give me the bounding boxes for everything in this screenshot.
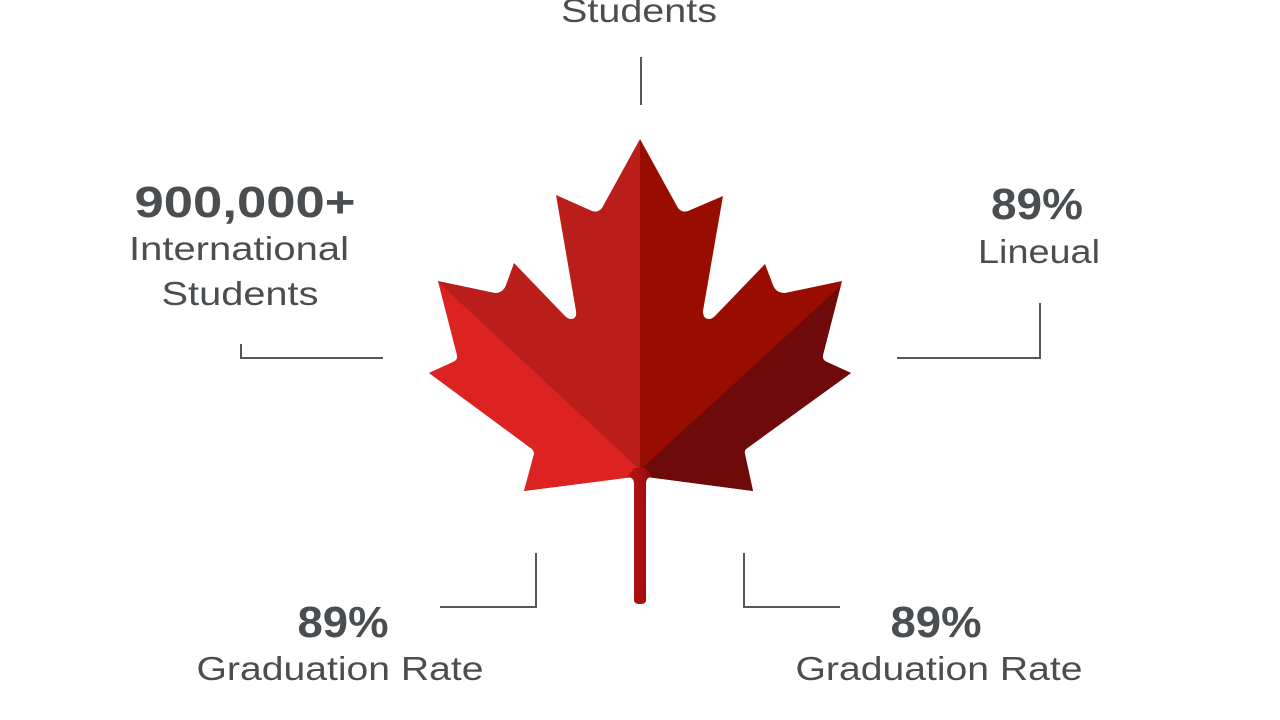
stat: international students: Students <box>162 275 318 312</box>
leaf stem <box>627 468 652 604</box>
stat: right: 89% <box>991 180 1083 229</box>
connector: bottom left <box>440 553 536 607</box>
stat: graduation rate right: Graduation Rate <box>796 650 1082 687</box>
stat: international students: 900,000+ <box>134 178 356 227</box>
icon: maple leaf <box>420 130 860 604</box>
connector: left <box>241 344 383 358</box>
stat: graduation rate right: 89% <box>890 598 982 647</box>
connector: right <box>897 303 1040 358</box>
stat: international students: International <box>129 230 349 267</box>
stat: right <box>978 180 1100 270</box>
stat: international students <box>129 178 356 312</box>
stat: graduation rate left: 89% <box>298 598 388 647</box>
stat: graduation rate left <box>196 598 484 687</box>
stat: right: Lineual <box>978 233 1100 270</box>
stat: graduation rate left: Graduation Rate <box>196 650 484 687</box>
connector: top <box>640 57 642 105</box>
leaf blade facets <box>420 130 860 500</box>
connector: bottom right <box>744 553 840 607</box>
stat: graduation rate right <box>796 598 1082 687</box>
